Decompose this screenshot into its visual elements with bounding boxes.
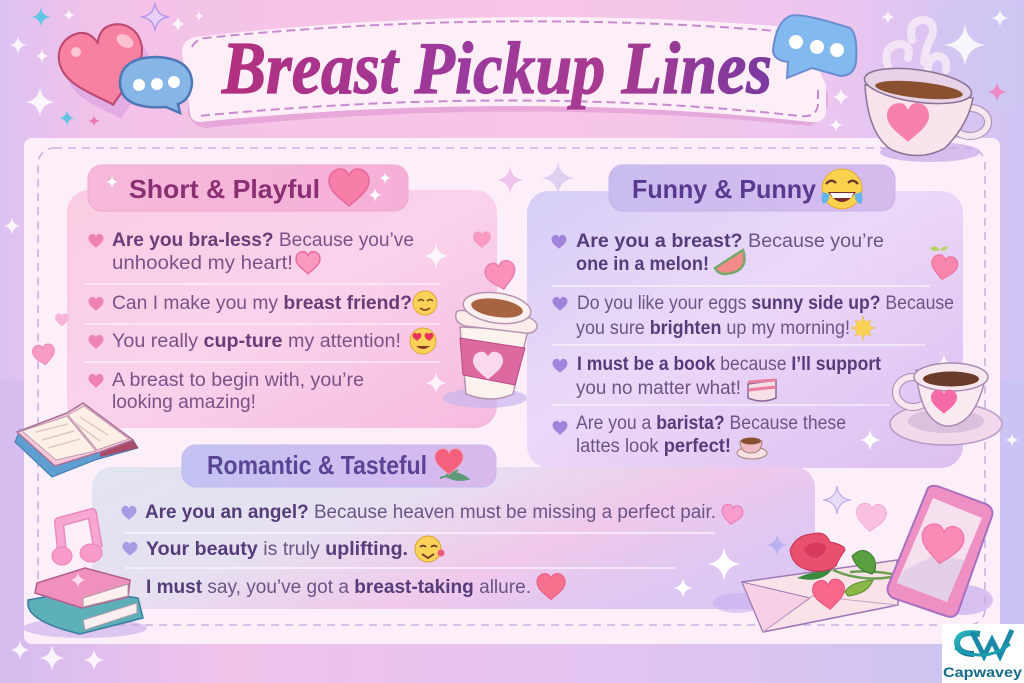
panel: short and playful <box>32 165 518 428</box>
main panel <box>24 138 1000 644</box>
bullet lines: I must be a book because I’ll support <box>577 354 882 375</box>
icon: envelope and rose <box>713 533 993 632</box>
heading pill <box>182 445 496 487</box>
bullet lines: unhooked my heart! <box>112 253 293 274</box>
heading pill <box>88 165 408 211</box>
bullet lines: You really cup-ture my attention! <box>112 331 401 352</box>
title: Breast Pickup Lines <box>221 28 772 110</box>
icon: open book <box>15 403 138 477</box>
logo <box>942 624 1024 683</box>
icon: coffee cup with steam <box>862 20 988 162</box>
icon: takeaway coffee <box>443 288 537 408</box>
bullet lines: Are you a barista? Because these <box>576 413 846 434</box>
bullet lines: Do you like your eggs sunny side up? Because <box>577 293 954 314</box>
bullet lines: Are you a breast? Because you’re <box>576 231 884 252</box>
icon: cup and saucer <box>890 363 1002 445</box>
bullet lines: lattes look perfect! <box>576 436 731 457</box>
panel: funny and punny <box>527 165 963 468</box>
title banner <box>182 17 828 128</box>
icon: right chat bubble <box>773 15 856 78</box>
bullet lines: one in a melon! <box>576 254 709 275</box>
icon: large heart <box>54 19 154 115</box>
logo wordmark: Capwavey <box>943 664 1022 680</box>
panel: romantic and tasteful <box>92 445 815 609</box>
bullet lines: you sure brighten up my morning! <box>576 318 850 339</box>
heading pill: Romantic & Tasteful <box>207 450 427 480</box>
bullet lines: looking amazing! <box>112 392 256 413</box>
heading pill <box>609 165 895 211</box>
bullet lines: you no matter what! <box>576 378 741 399</box>
bullet lines <box>552 231 954 459</box>
icon: left chat bubble <box>120 57 192 113</box>
icon: music note <box>52 513 102 565</box>
decorative hearts near phone <box>766 486 887 556</box>
icon: book stack <box>23 568 147 638</box>
bullet lines: Are you an angel? Because heaven must be missing a perfect pair. <box>145 502 716 523</box>
bullet lines: A breast to begin with, you’re <box>112 370 364 391</box>
bullet lines: Are you bra-less? Because you’ve <box>112 230 414 251</box>
icon: phone <box>888 486 992 617</box>
heading pill: Short & Playful <box>129 174 320 204</box>
icon: chat bubble and heart <box>54 19 162 129</box>
bullet lines <box>88 230 437 413</box>
heading pill: Funny & Punny <box>632 174 817 204</box>
bullet lines: Can I make you my breast friend? <box>112 293 412 314</box>
bullet lines: I must say, you’ve got a breast-taking allure. <box>146 577 531 598</box>
bullet lines: Your beauty is truly uplifting. <box>146 539 408 560</box>
bullet lines <box>122 502 744 600</box>
